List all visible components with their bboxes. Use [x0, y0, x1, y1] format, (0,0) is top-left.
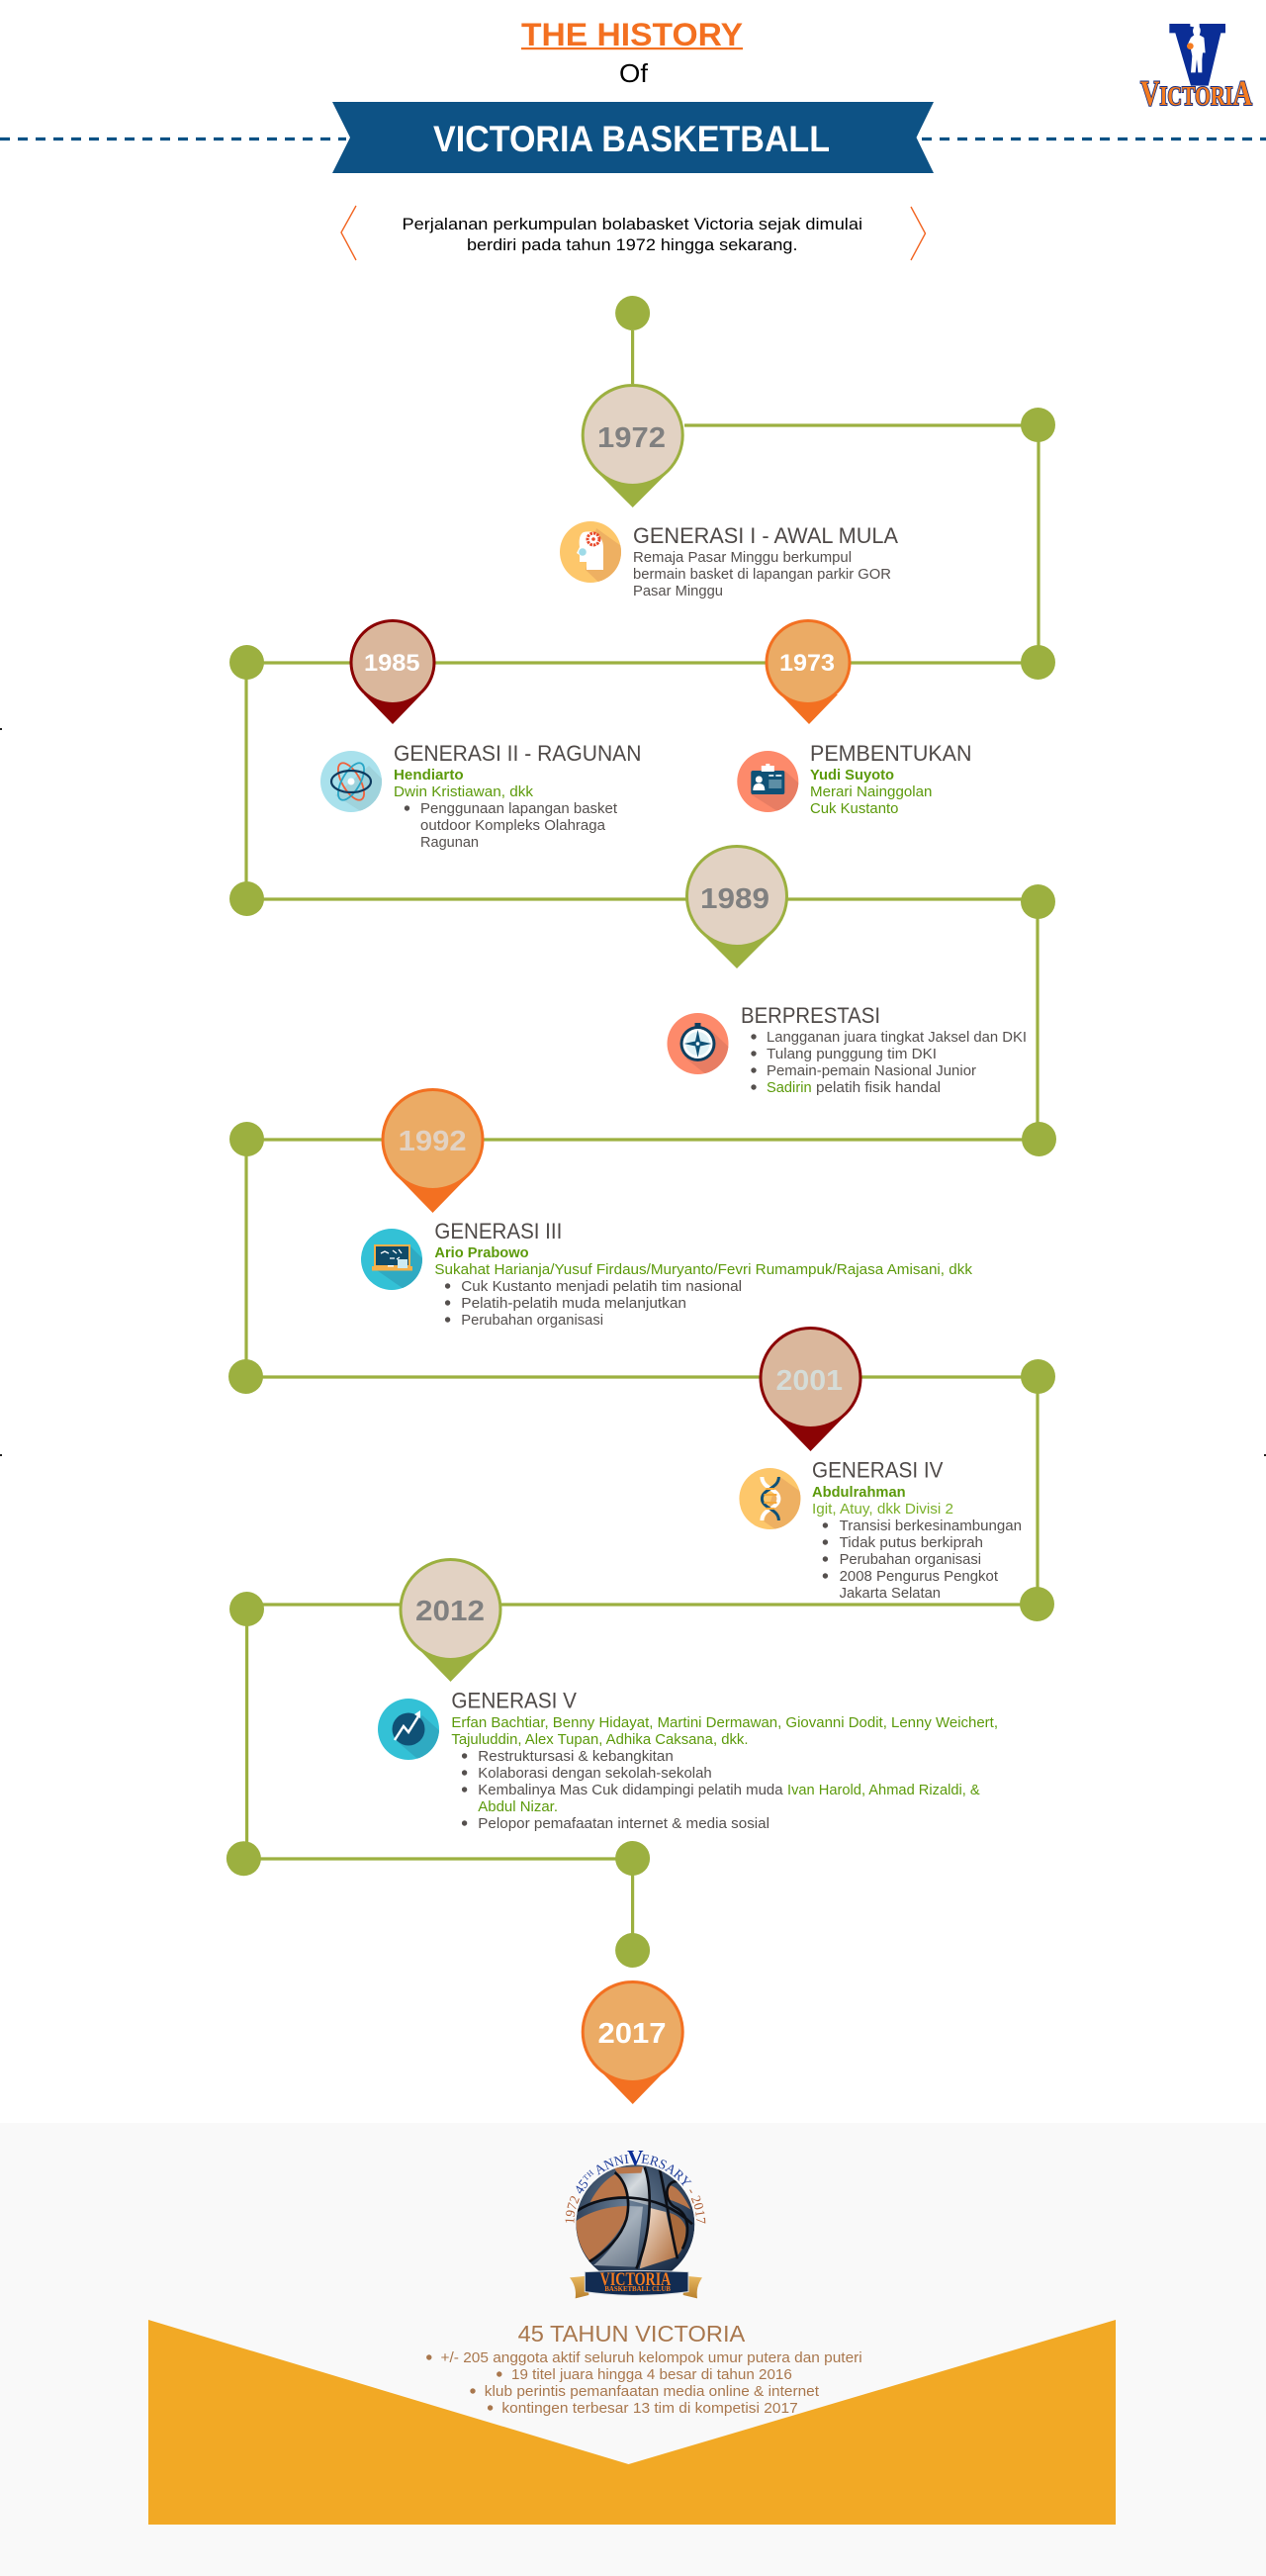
text: Pembentukan: Yudi Suyoto — [810, 768, 894, 783]
icon: atom — [320, 751, 385, 815]
pin 1985: 1985 — [364, 650, 419, 677]
text: 45 Tahun Victoria: klub perintis pemanfaatan media online & internet — [485, 2384, 819, 2400]
text: Berprestasi: Pemain-pemain Nasional Junior — [767, 1063, 976, 1079]
text: Pembentukan: PEMBENTUKAN — [810, 741, 971, 766]
text: Generasi I - Awal Mula: bermain basket di lapangan parkir GOR — [633, 567, 891, 583]
text: Generasi IV: Igit, Atuy, dkk Divisi 2 — [812, 1502, 953, 1518]
text: Generasi V: Kolaborasi dengan sekolah-sekolah — [478, 1766, 712, 1782]
text: Generasi III — [434, 1219, 973, 1329]
emblem: 45th anniversary basketball — [566, 2145, 706, 2299]
text: Generasi IV: 2008 Pengurus Pengkot — [840, 1569, 998, 1585]
emblem: 45th anniversary basketball: VICTORIA — [600, 2269, 672, 2290]
text: Generasi II - Ragunan: Dwin Kristiawan, dkk — [394, 784, 534, 800]
text: Generasi I - Awal Mula: Pasar Minggu — [633, 584, 723, 599]
icon: compass — [667, 1013, 732, 1077]
text: 45 Tahun Victoria: 19 titel juara hingga 4 besar di tahun 2016 — [511, 2367, 792, 2383]
text: Generasi II - Ragunan: Ragunan — [420, 835, 479, 851]
chevron left — [341, 206, 356, 260]
icon: dna — [739, 1468, 803, 1532]
text: Generasi IV: Jakarta Selatan — [840, 1586, 941, 1602]
pin 2012 — [401, 1559, 500, 1682]
title: the history: THE HISTORY — [521, 17, 743, 52]
pin 1985 — [351, 621, 434, 724]
text: 45 Tahun Victoria: 45 TAHUN VICTORIA — [518, 2321, 746, 2346]
text: Generasi IV — [812, 1458, 1022, 1602]
text: Berprestasi: BERPRESTASI — [741, 1003, 880, 1028]
text: Generasi V: GENERASI V — [451, 1689, 577, 1713]
text: Berprestasi: Tulang punggung tim DKI — [767, 1047, 937, 1062]
emblem: 45th anniversary basketball: ANNI — [596, 2155, 629, 2175]
banner: Victoria Basketball — [332, 102, 934, 173]
text: Generasi II - Ragunan: Penggunaan lapangan basket — [420, 801, 617, 817]
logo: Victoria — [1140, 24, 1252, 113]
text: Generasi IV: GENERASI IV — [812, 1458, 944, 1483]
text: Generasi IV: Perubahan organisasi — [840, 1552, 981, 1568]
intro text: berdiri pada tahun 1972 hingga sekarang. — [467, 236, 797, 254]
text: Generasi I - Awal Mula — [633, 523, 898, 599]
emblem: 45th anniversary basketball: TH — [583, 2169, 593, 2180]
icon: chalkboard — [361, 1229, 425, 1293]
dashed rule left — [0, 138, 346, 140]
text: Generasi I - Awal Mula: GENERASI I - AWAL MULA — [633, 523, 898, 548]
text: Berprestasi: pelatih fisik handal — [816, 1080, 941, 1096]
text: 45 Tahun Victoria: kontingen terbesar 13 tim di kompetisi 2017 — [501, 2401, 798, 2417]
pin 1989: 1989 — [700, 883, 769, 915]
text: Generasi IV: Abdulrahman — [812, 1485, 906, 1501]
text: Generasi II - Ragunan: outdoor Kompleks Olahraga — [420, 818, 606, 834]
banner: Victoria Basketball: VICTORIA BASKETBALL — [433, 119, 830, 159]
text: Generasi V: Abdul Nizar. — [478, 1799, 558, 1815]
text: Generasi III: Ario Prabowo — [434, 1245, 529, 1261]
icon: head with gear — [560, 521, 624, 586]
text: 45 Tahun Victoria: +/- 205 anggota aktif seluruh kelompok umur putera dan puteri — [441, 2350, 862, 2366]
title: of: Of — [619, 58, 649, 88]
pin 2017 — [583, 1982, 682, 2104]
text: Generasi V: Ivan Harold, Ahmad Rizaldi, & — [787, 1783, 980, 1798]
pin 1992 — [383, 1090, 483, 1213]
text: Generasi III: Pelatih-pelatih muda melanjutkan — [461, 1296, 686, 1312]
chevron right — [911, 207, 926, 260]
text: Generasi II - Ragunan: Hendiarto — [394, 768, 464, 783]
pin 2012: 2012 — [415, 1596, 485, 1627]
pin 2017: 2017 — [597, 2018, 667, 2050]
text: Pembentukan: Cuk Kustanto — [810, 801, 898, 817]
pin 1973: 1973 — [779, 650, 835, 677]
text: Generasi V: Tajuluddin, Alex Tupan, Adhika Caksana, dkk. — [451, 1732, 748, 1748]
text: Generasi IV: Transisi berkesinambungan — [840, 1518, 1022, 1534]
icon: id card — [737, 751, 801, 815]
text: Generasi IV: Tidak putus berkiprah — [840, 1535, 983, 1551]
text: Generasi V — [451, 1689, 998, 1832]
intro text — [402, 216, 862, 254]
text: Generasi III: Cuk Kustanto menjadi pelatih tim nasional — [461, 1279, 742, 1295]
text: Generasi V: Kembalinya Mas Cuk didampingi pelatih muda — [478, 1783, 784, 1798]
pin 1973 — [767, 621, 850, 724]
emblem: 45th anniversary basketball: 1972 45 — [566, 2179, 588, 2224]
text: Berprestasi: Sadirin — [767, 1080, 812, 1096]
pin 2001 — [761, 1328, 860, 1451]
pin 2001: 2001 — [775, 1365, 843, 1397]
emblem: 45th anniversary basketball: ERSARY - 2017 — [641, 2155, 706, 2224]
text: Berprestasi: Langganan juara tingkat Jaksel dan DKI — [767, 1030, 1027, 1046]
text: Generasi V: Pelopor pemafaatan internet & media sosial — [478, 1816, 769, 1832]
text: Generasi II - Ragunan — [394, 741, 641, 851]
text: Generasi I - Awal Mula: Remaja Pasar Minggu berkumpul — [633, 550, 852, 566]
icon: growth chart — [378, 1699, 442, 1763]
text: Generasi III: Sukahat Harianja/Yusuf Firdaus/Muryanto/Fevri Rumampuk/Rajasa Amisani, dkk — [434, 1262, 973, 1278]
text: Generasi III: Perubahan organisasi — [461, 1313, 603, 1329]
text: Generasi V: Restruktursasi & kebangkitan — [478, 1749, 674, 1765]
pin 1989 — [686, 847, 787, 968]
pin 1972 — [583, 386, 682, 507]
text: Generasi V: Erfan Bachtiar, Benny Hidayat, Martini Dermawan, Giovanni Dodit, Lenny Weichert, — [451, 1715, 998, 1731]
logo: Victoria: VICTORIA — [1140, 73, 1252, 113]
text: 45 Tahun Victoria — [426, 2321, 862, 2417]
text: Pembentukan: Merari Nainggolan — [810, 784, 932, 800]
dashed rule right — [922, 138, 1266, 140]
intro text: Perjalanan perkumpulan bolabasket Victoria sejak dimulai — [402, 216, 862, 233]
text: Generasi III: GENERASI III — [434, 1219, 562, 1243]
emblem: 45th anniversary basketball: BASKETBALL CLUB — [604, 2285, 671, 2293]
pin 1992: 1992 — [399, 1126, 467, 1157]
emblem: 45th anniversary basketball: V — [627, 2145, 644, 2169]
pin 1972: 1972 — [597, 422, 666, 454]
text: Berprestasi — [741, 1003, 1027, 1096]
timeline path — [226, 296, 1056, 1968]
text: Pembentukan — [810, 741, 971, 817]
footer panel — [0, 2123, 1266, 2576]
text: Generasi II - Ragunan: GENERASI II - RAGUNAN — [394, 741, 641, 766]
